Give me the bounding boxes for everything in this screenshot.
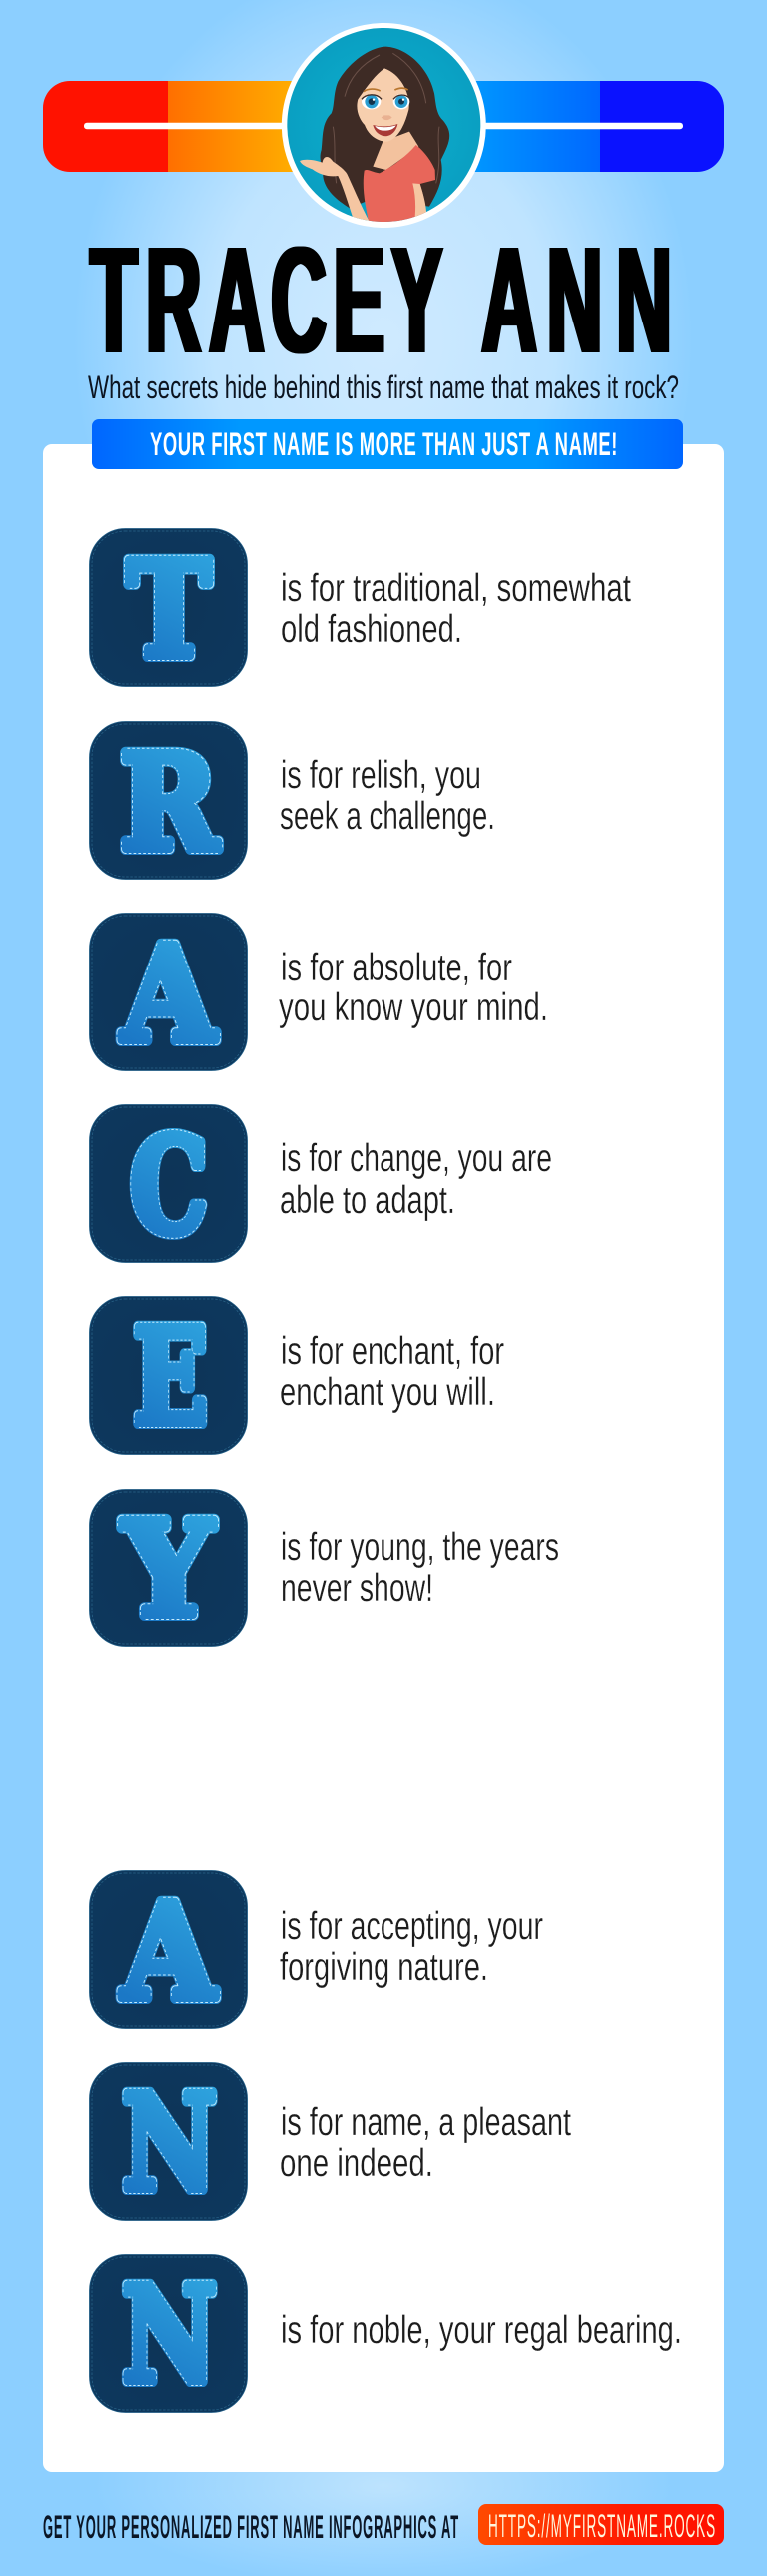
icon: letter T tile: [90, 529, 248, 688]
text: letter R meaning: [280, 754, 495, 838]
row: letter Y: [90, 1490, 559, 1647]
text: letter A meaning: forgiving nature.: [280, 1946, 488, 1989]
text: letter A meaning: is for accepting, your: [281, 1905, 543, 1948]
row: letter A: [90, 913, 548, 1072]
icon: letter Y tile: Y: [121, 1493, 215, 1647]
row: letter E: [90, 1296, 504, 1455]
text: letter A meaning: [280, 1905, 543, 1989]
portrait: woman in circular frame: [282, 23, 489, 230]
text: letter A meaning: [279, 947, 548, 1029]
icon: letter C tile: C: [130, 1109, 208, 1264]
icon: letter Y tile: [90, 1490, 248, 1647]
icon: letter N tile: N: [122, 2258, 217, 2413]
text: letter R meaning: is for relish, you: [281, 754, 481, 797]
icon: letter N tile: N: [122, 2066, 217, 2221]
icon: letter C tile: [90, 1104, 248, 1264]
text: letter T meaning: [281, 567, 631, 651]
icon: letter T tile: T: [127, 533, 211, 688]
row: first letter N: [90, 2063, 571, 2221]
icon: letter N tile: N: [122, 2066, 217, 2221]
white content panel: [43, 444, 724, 2472]
banner: [92, 419, 683, 469]
icon: letter N tile: N: [122, 2258, 217, 2413]
icon: letter E tile: E: [133, 1300, 208, 1455]
icon: letter A tile: [90, 913, 248, 1072]
icon: letter E tile: E: [133, 1300, 208, 1455]
icon: letter A tile: A: [120, 918, 216, 1072]
text: letter Y meaning: [281, 1526, 559, 1610]
text: letter T meaning: is for traditional, somewhat: [281, 567, 631, 610]
text: letter Y meaning: never show!: [281, 1567, 433, 1610]
text: letter C meaning: able to adapt.: [280, 1179, 455, 1222]
text: letter E meaning: [280, 1330, 504, 1414]
icon: letter N tile: N: [122, 2258, 217, 2413]
icon: letter T tile: T: [127, 533, 211, 688]
text: letter T meaning: old fashioned.: [281, 608, 462, 651]
row: letter T: [90, 529, 631, 688]
row: letter R: [90, 721, 495, 881]
text: letter N meaning: one indeed.: [280, 2142, 433, 2185]
icon: letter Y tile: Y: [121, 1493, 215, 1647]
icon: letter T tile: T: [127, 533, 211, 688]
text: letter C meaning: [280, 1137, 552, 1222]
text: letter E meaning: enchant you will.: [280, 1371, 495, 1414]
icon: letter E tile: [90, 1296, 248, 1455]
icon: letter C tile: C: [130, 1109, 208, 1264]
row: second letter N: [90, 2254, 682, 2413]
text: letter C meaning: is for change, you are: [281, 1137, 552, 1180]
icon: letter R tile: R: [120, 726, 219, 881]
row: letter C: [90, 1104, 552, 1264]
header colour bar: [43, 81, 724, 172]
icon: letter A tile: A: [120, 918, 216, 1072]
icon: letter R tile: [90, 721, 248, 881]
icon: letter N tile: N: [122, 2066, 217, 2221]
icon: letter A tile: [90, 1871, 248, 2030]
icon: letter A tile: A: [120, 918, 216, 1072]
text: letter A meaning: you know your mind.: [279, 986, 548, 1029]
icon: letter E tile: E: [133, 1300, 208, 1455]
text: letter E meaning: is for enchant, for: [281, 1330, 504, 1373]
icon: letter R tile: R: [120, 726, 219, 881]
text: letter N meaning: [280, 2101, 571, 2185]
row: second-name letter A: [90, 1871, 543, 2030]
icon: letter Y tile: Y: [121, 1493, 215, 1647]
icon: letter C tile: C: [130, 1109, 208, 1264]
text: letter A meaning: is for absolute, for: [281, 947, 512, 989]
icon: letter A tile: A: [120, 1875, 216, 2030]
icon: letter R tile: R: [120, 726, 219, 881]
title: TRACEY ANN: [90, 215, 672, 385]
icon: letter A tile: A: [120, 1875, 216, 2030]
icon: letter A tile: A: [120, 1875, 216, 2030]
text: letter N meaning: is for name, a pleasant: [281, 2101, 571, 2144]
text: letter R meaning: seek a challenge.: [280, 795, 495, 838]
text: letter Y meaning: is for young, the years: [281, 1526, 559, 1569]
